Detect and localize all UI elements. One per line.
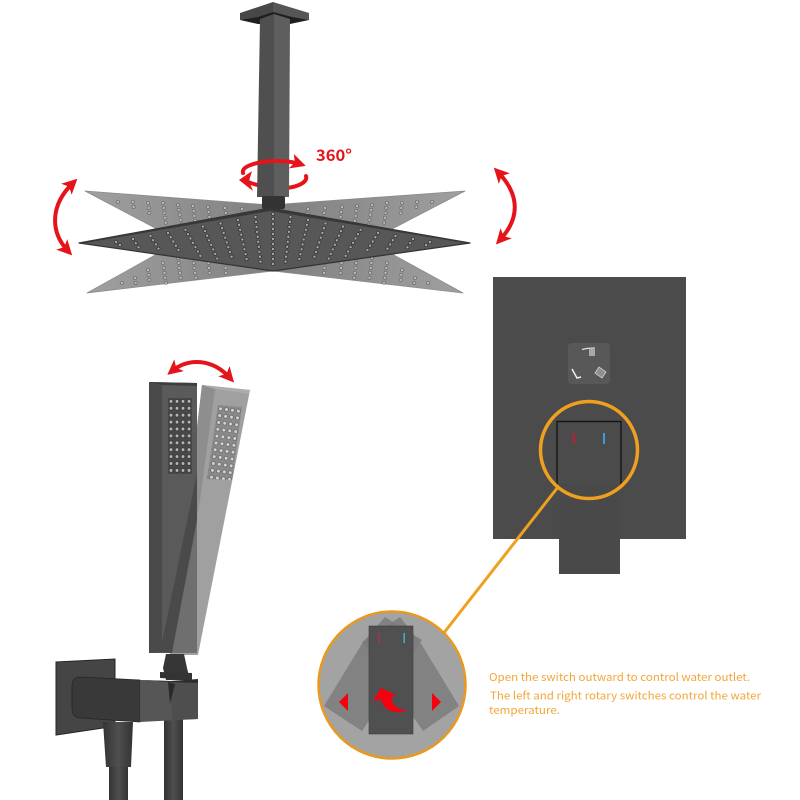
wall plate — [56, 659, 115, 735]
hand shower swing arrow — [172, 362, 230, 378]
hot mark — [378, 633, 380, 643]
upper tilted shower head ghost — [85, 191, 465, 229]
360 rotation arrow, rear arrowhead — [239, 171, 253, 191]
swivel connector — [262, 196, 285, 209]
main shower head — [79, 208, 470, 271]
valve back plate — [493, 277, 686, 539]
line two: The left and right rotary switches control the water — [490, 688, 762, 704]
left tilt arrow — [55, 183, 73, 251]
orange highlight circle — [540, 402, 638, 498]
right red arrow — [432, 693, 441, 711]
icon: rain shower — [582, 348, 595, 356]
cold mark — [404, 633, 405, 643]
tilted hand shower ghost — [170, 385, 250, 655]
instructions text — [489, 669, 762, 718]
ceiling mount plate — [240, 2, 309, 24]
handle front — [369, 626, 413, 734]
360 degrees label: 360° — [316, 142, 352, 166]
ceiling arm square pipe — [257, 14, 290, 197]
holder arm — [72, 677, 198, 722]
orange leader line — [443, 487, 558, 634]
wall mixer valve — [493, 277, 686, 574]
swivel joint — [160, 654, 192, 680]
rain shower head assembly — [55, 2, 515, 293]
handle rotated left — [324, 617, 422, 731]
left red arrow — [339, 693, 348, 711]
360 rotation arrow, front arc — [243, 161, 300, 173]
hot indicator — [572, 433, 575, 444]
hand shower assembly — [56, 362, 250, 800]
line one: Open the switch outward to control water outlet. — [489, 669, 750, 685]
lever handle — [557, 422, 621, 574]
lower tilted shower head ghost — [87, 254, 463, 293]
360 rotation arrow, rear arc — [244, 176, 306, 188]
magnified handle callout — [318, 612, 466, 758]
right tilt arrow — [498, 172, 515, 240]
cold indicator — [603, 433, 605, 444]
line three: temperature. — [489, 702, 560, 718]
left hose — [103, 722, 133, 800]
icon: body spray — [595, 367, 606, 378]
diverter selector knob — [568, 343, 610, 384]
icon: hand shower — [572, 369, 581, 378]
right hose — [164, 719, 183, 800]
outward curved arrow — [373, 688, 408, 712]
callout circle — [318, 612, 466, 758]
handle rotated right — [362, 617, 459, 731]
hand shower body — [149, 382, 197, 653]
